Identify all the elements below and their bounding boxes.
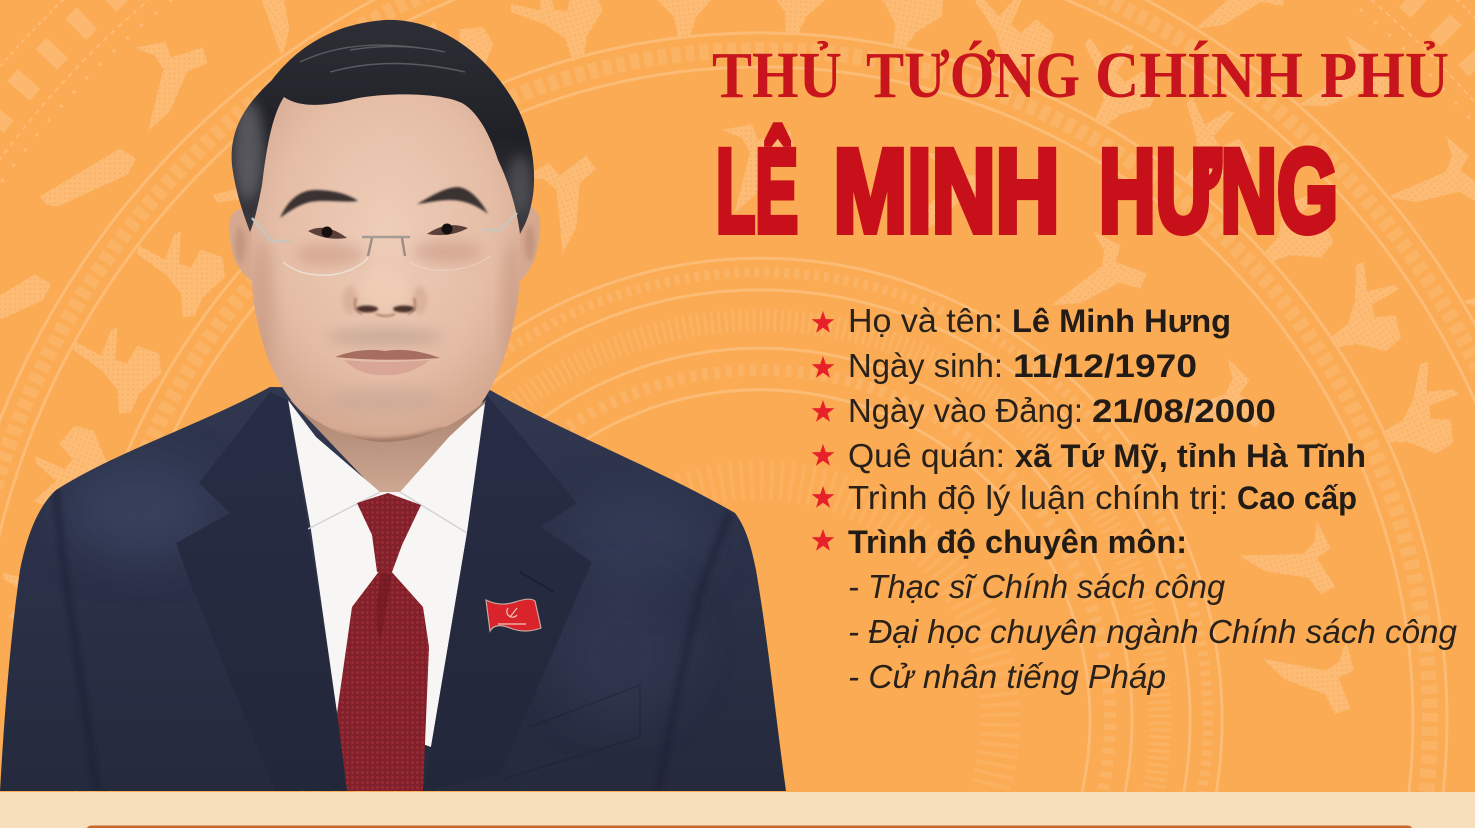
hair	[232, 20, 534, 234]
neck	[290, 400, 487, 495]
party entry date	[848, 392, 1276, 429]
name heading: LÊ	[716, 124, 798, 258]
shirt	[288, 400, 485, 747]
party pin flag	[486, 599, 541, 631]
title: Thủ tướng Chính phủ: PHỦ	[1320, 39, 1449, 112]
lapel buttonhole	[520, 572, 554, 592]
portrait	[0, 20, 786, 791]
professional qualifications	[848, 524, 1458, 695]
mouth	[335, 350, 440, 375]
full name	[848, 302, 1231, 339]
hometown: xã Tứ Mỹ, tỉnh Hà Tĩnh	[1015, 438, 1366, 474]
eyes	[308, 224, 468, 239]
hair highlights	[232, 45, 532, 215]
title: Thủ tướng Chính phủ: CHÍNH	[1095, 39, 1303, 112]
hometown	[848, 437, 1366, 474]
face	[251, 90, 520, 442]
bottom cream band	[0, 792, 1475, 828]
bio list	[812, 302, 1458, 695]
name heading: MINH	[834, 126, 1060, 258]
ears	[229, 205, 540, 284]
professional qualifications: - Cử nhân tiếng Pháp	[848, 658, 1166, 695]
name heading: HƯNG	[1099, 126, 1338, 258]
bullet stars	[812, 311, 834, 551]
eyebrows	[280, 187, 488, 218]
title: Thủ tướng Chính phủ	[712, 39, 1449, 112]
professional qualifications: - Đại học chuyên ngành Chính sách công	[848, 613, 1458, 650]
title: Thủ tướng Chính phủ: THỦ	[712, 39, 842, 112]
party entry date: 21/08/2000	[1092, 393, 1276, 429]
face shading	[250, 240, 522, 441]
full name: Họ và tên:	[848, 302, 1003, 339]
political theory level: Trình độ lý luận chính trị:	[848, 479, 1228, 516]
glasses	[252, 213, 517, 275]
party entry date: Ngày vào Đảng:	[848, 392, 1083, 429]
date of birth: 11/12/1970	[1013, 348, 1197, 384]
hometown: Quê quán:	[848, 437, 1005, 474]
full name: Lê Minh Hưng	[1012, 303, 1231, 339]
professional qualifications: - Thạc sĩ Chính sách công	[848, 568, 1226, 605]
political theory level: Cao cấp	[1237, 480, 1357, 516]
date of birth	[848, 347, 1197, 384]
professional qualifications: Trình độ chuyên môn:	[848, 524, 1187, 560]
tie	[337, 493, 429, 791]
left lapel	[176, 392, 347, 791]
date of birth: Ngày sinh:	[848, 347, 1003, 384]
suit shading	[56, 460, 730, 791]
name heading	[716, 124, 1338, 258]
title: Thủ tướng Chính phủ: TƯỚNG	[866, 39, 1080, 112]
right lapel	[423, 395, 592, 791]
nose	[355, 298, 415, 316]
suit jacket	[0, 387, 786, 791]
